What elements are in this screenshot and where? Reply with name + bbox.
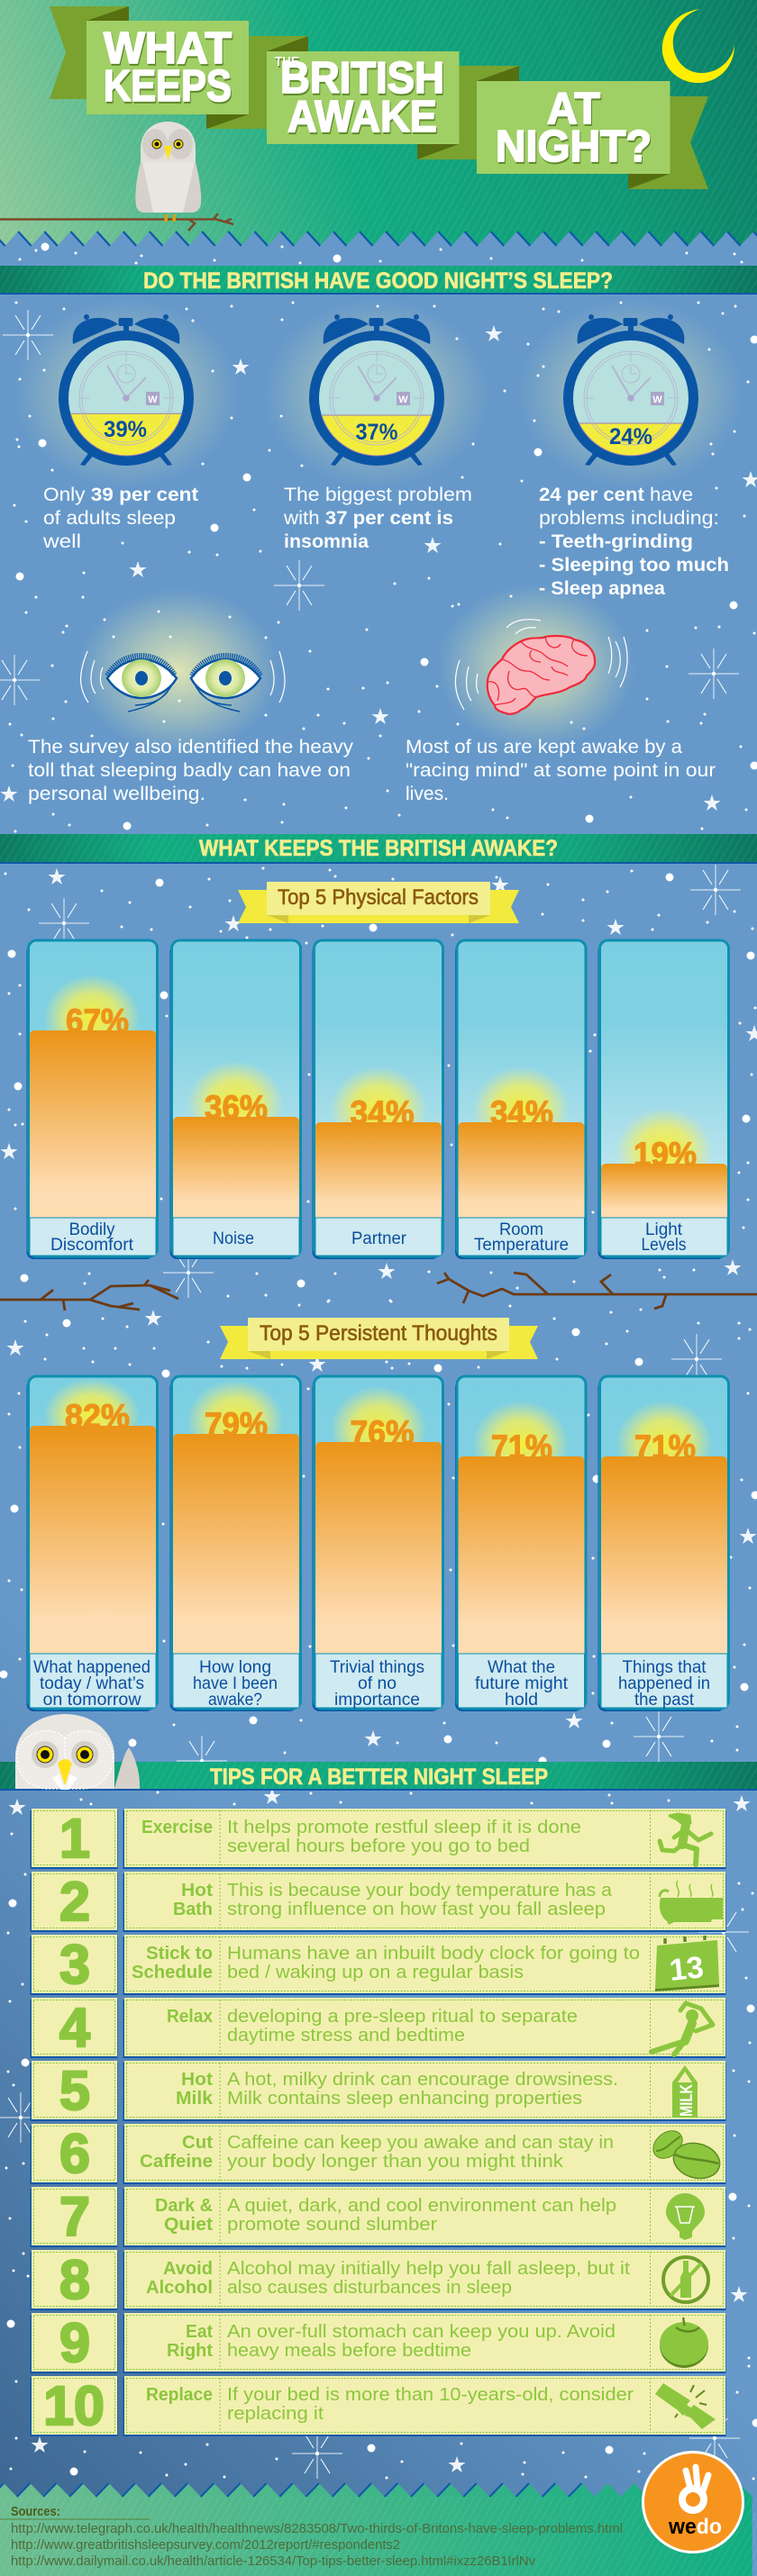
heading: do the British have good night's sleep: DO THE BRITISH HAVE GOOD NIGHT’S SLEEP?: [143, 268, 613, 294]
sources: [0, 2504, 623, 2569]
clock: 39%: [59, 314, 194, 466]
tip 7: promote sound slumber: [227, 2215, 437, 2235]
title: AT: [547, 85, 600, 133]
bar: partner 34%: Partner: [351, 1229, 407, 1248]
bar: what happened today 82%: [27, 1376, 157, 1711]
tip 1: It helps promote restful sleep if it is done: [227, 1818, 581, 1837]
title: [104, 24, 652, 171]
sources: http://www.dailymail.co.uk/health/article-126534/Top-tips-better-sleep.html#ixzz26B1IrlNv: [11, 2553, 535, 2569]
bar: how long awake 79%: [169, 1376, 301, 1711]
logo: wedo: wedo: [668, 2515, 722, 2539]
text: 39 per cent: Only 39 per cent: [43, 485, 198, 505]
tip 8: [31, 2249, 726, 2310]
bar: room temperature 34%: Temperature: [474, 1236, 569, 1255]
tip 2: 2: [59, 1871, 90, 1932]
text: heavy toll: [28, 737, 354, 804]
title: WHAT: [104, 24, 232, 73]
tip 5: [31, 2060, 726, 2121]
tip 4: [31, 1997, 726, 2058]
branch: right: [437, 1273, 757, 1309]
tip 8: also causes disturbances in sleep: [227, 2278, 512, 2298]
tip 4: developing a pre-sleep ritual to separate: [227, 2007, 578, 2027]
tip 7: Dark &: [155, 2196, 213, 2216]
tip 9: An over-full stomach can keep you up. Avoid: [227, 2322, 616, 2342]
bar: bodily discomfort 67%: Bodily: [68, 1220, 115, 1239]
text: 39 per cent: [42, 485, 198, 552]
tip 5: Milk: [176, 2089, 214, 2109]
bar: light levels 19%: Light: [645, 1220, 683, 1239]
branch: left: [0, 1280, 178, 1311]
bar: the future 71%: future might: [475, 1674, 569, 1693]
bar: what happened today 82%: 82%: [65, 1398, 130, 1435]
heading: do the British have good night's sleep: [0, 266, 757, 295]
moon: [662, 9, 734, 83]
tip 6: Cut: [182, 2133, 213, 2153]
text: 24 per cent: problems including:: [539, 508, 719, 529]
bar chart: persistent thoughts: [27, 1376, 728, 1711]
text: 24 per cent: [539, 485, 729, 599]
bar: how long awake 79%: have I been: [193, 1674, 278, 1693]
text: racing mind: [406, 737, 716, 804]
tip 3: [31, 1934, 726, 1995]
icon: light bulb: [666, 2193, 705, 2240]
icon: milk carton: MILK: [678, 2084, 697, 2117]
bar: light levels 19%: Levels: [642, 1236, 687, 1255]
bar: room temperature 34%: [455, 940, 586, 1259]
bar: what happened today 82%: today / what’s: [40, 1674, 144, 1693]
bar: trivial things 76%: importance: [334, 1691, 420, 1710]
tip 7: 7: [59, 2186, 90, 2247]
sources: http://www.greatbritishsleepsurvey.com/2012report/#respondents2: [11, 2537, 400, 2553]
tip 9: [31, 2312, 726, 2373]
ribbon: top 5 physical factors: [238, 882, 519, 923]
bottom green zigzag: [0, 2483, 757, 2576]
bar: room temperature 34%: Room: [499, 1220, 543, 1239]
text: 39 per cent: of adults sleep: [43, 508, 176, 529]
tip 10: [31, 2375, 726, 2436]
logo: wedo: [643, 2452, 743, 2553]
tip 2: strong influence on how fast you fall asleep: [227, 1900, 606, 1919]
bar chart: physical factors: [27, 940, 728, 1259]
clock: 37%: [309, 314, 444, 466]
ribbon: top 5 persistent thoughts: [220, 1318, 538, 1359]
tip 3: Stick to: [146, 1944, 213, 1964]
clock: 24%: 24%: [609, 424, 652, 449]
tip 5: A hot, milky drink can encourage drowsiness.: [227, 2070, 618, 2090]
bar: the future 71%: [455, 1376, 586, 1711]
tip 10: 10: [43, 2375, 105, 2436]
icon: calendar: [655, 1936, 719, 1991]
title: THE: [275, 54, 299, 69]
text: heavy toll: personal wellbeing.: [28, 784, 205, 804]
tip 10: Replace: [146, 2385, 213, 2405]
text: 24 per cent: - Sleeping too much: [539, 555, 729, 576]
bar: partner 34%: 34%: [350, 1094, 415, 1131]
bar: trivial things 76%: of no: [358, 1674, 397, 1693]
tip 10: If your bed is more than 10-years-old, consider: [227, 2385, 634, 2405]
tip 5: Hot: [181, 2070, 213, 2090]
tip 2: This is because your body temperature has a: [227, 1881, 613, 1900]
text: racing mind: lives.: [406, 784, 449, 804]
bar: trivial things 76%: [312, 1376, 443, 1711]
tip 1: Exercise: [141, 1818, 213, 1837]
bar: noise 36%: Noise: [213, 1229, 254, 1248]
bar: partner 34%: [312, 940, 443, 1259]
tip 3: bed / waking up on a regular basis: [227, 1963, 524, 1982]
clock: 24%: W: [652, 395, 662, 405]
clock: 39%: 39%: [104, 417, 147, 442]
text: 37 per cent: with 37 per cent is: [283, 508, 453, 529]
tip 8: 8: [59, 2249, 90, 2310]
tip 6: 6: [59, 2123, 90, 2184]
tip 1: 1: [59, 1808, 90, 1869]
tip 4: Relax: [167, 2007, 213, 2027]
tip 4: 4: [59, 1997, 90, 2058]
tip 1: several hours before you go to bed: [227, 1837, 530, 1856]
icon: no alcohol: [663, 2257, 708, 2302]
tip 3: Schedule: [132, 1963, 213, 1982]
icon: staring eyes: [81, 651, 285, 712]
zigzag edge: [0, 231, 757, 246]
ribbon: top 5 persistent thoughts: Top 5 Persistent Thoughts: [260, 1321, 497, 1346]
tip 9: Right: [167, 2341, 213, 2361]
icon: relaxing person: [652, 2003, 713, 2054]
icon: broken bed plank: [655, 2383, 716, 2429]
icon: milk carton: [672, 2065, 698, 2118]
header background: [0, 0, 757, 270]
tip 2: [31, 1871, 726, 1932]
tip 2: Hot: [181, 1881, 213, 1900]
bar: how long awake 79%: How long: [199, 1658, 271, 1677]
bar: light levels 19%: [598, 940, 728, 1259]
text: 37 per cent: insomnia: [284, 531, 369, 552]
clock: 39%: W: [148, 395, 158, 405]
clock: 37%: W: [398, 395, 408, 405]
bar: what happened today 82%: on tomorrow: [43, 1691, 141, 1710]
tip 8: Avoid: [163, 2259, 213, 2279]
clock: 24%: [563, 314, 698, 466]
tip 2: Bath: [173, 1900, 213, 1919]
bar: noise 36%: [169, 940, 301, 1259]
title: NIGHT?: [496, 122, 652, 171]
clock: 37%: 37%: [355, 420, 398, 445]
tip 6: Caffeine can keep you awake and can stay in: [227, 2133, 614, 2153]
ribbon: top 5 physical factors: Top 5 Physical Factors: [278, 885, 479, 910]
heading: tips for a better night sleep: [0, 1762, 757, 1791]
bar: the future 71%: 71%: [491, 1429, 552, 1465]
tip 4: daytime stress and bedtime: [227, 2026, 465, 2045]
bar: how long awake 79%: 79%: [205, 1406, 268, 1443]
heading: what keeps the British awake: WHAT KEEPS THE BRITISH AWAKE?: [199, 836, 558, 861]
tip 1: [31, 1808, 726, 1869]
text: heavy toll: toll that sleeping badly can have on: [28, 760, 351, 781]
bar: bodily discomfort 67%: [27, 940, 157, 1259]
bar: trivial things 76%: Trivial things: [330, 1658, 424, 1677]
icon: coffee beans: [648, 2125, 724, 2183]
icon: runner: [660, 1814, 711, 1864]
bar: the past 71%: the past: [634, 1691, 695, 1710]
branch: [0, 213, 233, 231]
bar: the past 71%: [598, 1376, 728, 1711]
bar: light levels 19%: 19%: [634, 1136, 697, 1173]
glows: [14, 299, 743, 754]
tip 7: A quiet, dark, and cool environment can help: [227, 2196, 616, 2216]
title ribbons: [50, 6, 708, 189]
bar: the past 71%: Things that: [622, 1658, 707, 1677]
heading: what keeps the British awake: [0, 834, 757, 864]
bar: bodily discomfort 67%: 67%: [66, 1002, 129, 1039]
bar: noise 36%: 36%: [205, 1089, 268, 1126]
text: 37 per cent: The biggest problem: [284, 485, 472, 505]
text: 24 per cent: - Teeth-grinding: [539, 531, 693, 552]
bar: the past 71%: happened in: [618, 1674, 710, 1693]
text: 24 per cent: - Sleep apnea: [539, 578, 665, 599]
sources: Sources:: [11, 2504, 60, 2519]
text: 39 per cent: well: [42, 531, 81, 552]
tip 6: Caffeine: [140, 2152, 213, 2172]
text: heavy toll: The survey also identified the heavy: [28, 737, 354, 757]
title: BRITISH: [280, 54, 444, 103]
bar: what happened today 82%: What happened: [33, 1658, 150, 1677]
text: 37 per cent: [283, 485, 472, 552]
text: racing mind: "racing mind" at some point in our: [406, 760, 716, 781]
tip 6: [31, 2123, 726, 2184]
text: 24 per cent: 24 per cent have: [539, 485, 693, 505]
bar: the future 71%: hold: [505, 1691, 538, 1710]
text: racing mind: Most of us are kept awake by a: [406, 737, 682, 757]
icon: apple: [660, 2317, 708, 2368]
tip 9: 9: [59, 2312, 90, 2373]
tip 9: heavy meals before bedtime: [227, 2341, 471, 2361]
bar: room temperature 34%: 34%: [490, 1094, 553, 1131]
owl: [135, 122, 201, 222]
heading: tips for a better night sleep: TIPS FOR A BETTER NIGHT SLEEP: [210, 1764, 548, 1790]
bar: trivial things 76%: 76%: [350, 1414, 415, 1451]
title: AWAKE: [287, 93, 437, 141]
tip 8: Alcohol may initially help you fall asleep, but it: [227, 2259, 630, 2279]
bar: the future 71%: What the: [488, 1658, 555, 1677]
icon: brain: [455, 620, 627, 714]
tip 7: Quiet: [164, 2215, 213, 2235]
tip 6: your body longer than you might think: [227, 2152, 564, 2172]
icon: calendar: 13: [668, 1950, 706, 1988]
icon: bathtub: [660, 1881, 723, 1925]
owl peeking over banner: [15, 1714, 140, 1791]
bar: how long awake 79%: awake?: [208, 1691, 262, 1710]
bar: the past 71%: 71%: [634, 1429, 696, 1465]
sources: http://www.telegraph.co.uk/health/healthnews/8283508/Two-thirds-of-Britons-have-sleep-problems.html: [11, 2521, 623, 2536]
tip 8: Alcohol: [146, 2278, 213, 2298]
tip 5: Milk contains sleep enhancing properties: [227, 2089, 582, 2109]
tip 3: Humans have an inbuilt body clock for going to: [227, 1944, 640, 1964]
tip 10: replacing it: [227, 2404, 324, 2424]
tip 7: [31, 2186, 726, 2247]
bar: bodily discomfort 67%: Discomfort: [50, 1236, 134, 1255]
title: KEEPS: [104, 62, 232, 111]
tip 3: 3: [59, 1934, 90, 1995]
tip 9: Eat: [186, 2322, 213, 2342]
tip 5: 5: [59, 2060, 90, 2121]
